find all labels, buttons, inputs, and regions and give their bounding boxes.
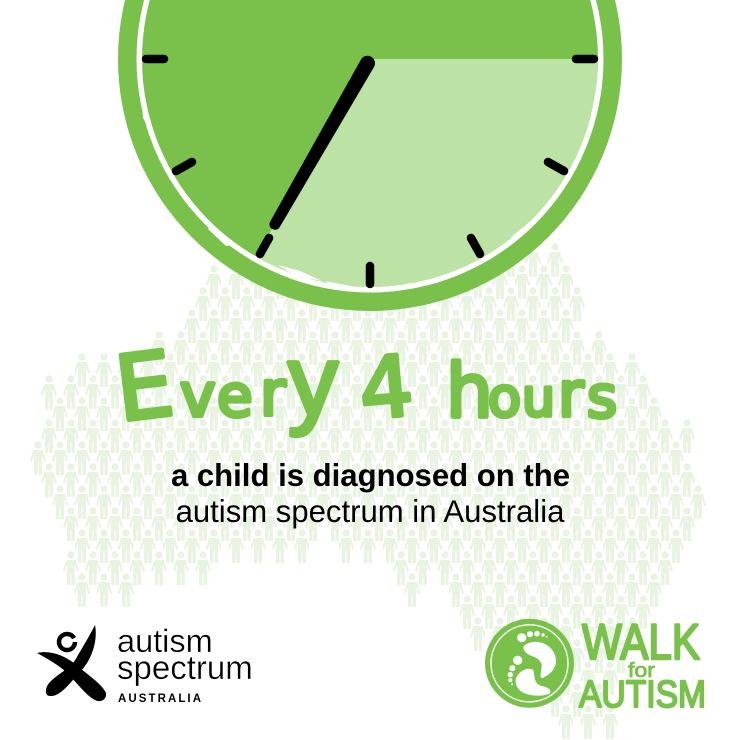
title: 4	[355, 337, 417, 439]
hour tick marks	[146, 59, 594, 284]
title: e	[217, 362, 253, 430]
title: E	[110, 332, 179, 443]
map of Australia made of people	[27, 242, 709, 740]
logo figure icon	[37, 625, 106, 701]
elapsed time wedge	[256, 59, 598, 287]
for wordmark: for	[628, 660, 655, 682]
autism wordmark: AUTISM	[579, 674, 706, 716]
clock	[118, 0, 622, 311]
title: r	[260, 357, 286, 430]
footprint badge	[485, 619, 574, 708]
rough brush edge	[141, 78, 597, 288]
subheading bold line: a child is diagnosed on the	[171, 458, 570, 493]
subheading regular line: autism spectrum in Australia	[176, 494, 565, 529]
title: v	[180, 361, 216, 431]
title: u	[522, 369, 555, 429]
clock white rim	[136, 0, 604, 292]
title: h	[446, 349, 493, 435]
logo wordmark: autism	[117, 623, 213, 659]
title: s	[587, 363, 617, 431]
logo: Autism Spectrum Australia	[37, 623, 253, 705]
logo country name: AUSTRALIA	[118, 693, 201, 705]
title: r	[558, 358, 584, 431]
title: y	[288, 325, 338, 437]
walk wordmark: WALK	[582, 614, 700, 670]
logo wordmark: spectrum	[117, 649, 253, 686]
logo: Walk for Autism	[485, 614, 706, 716]
clock outer ring	[118, 0, 622, 311]
clock face	[142, 0, 598, 287]
clock hand	[269, 56, 375, 230]
title: o	[488, 366, 521, 429]
